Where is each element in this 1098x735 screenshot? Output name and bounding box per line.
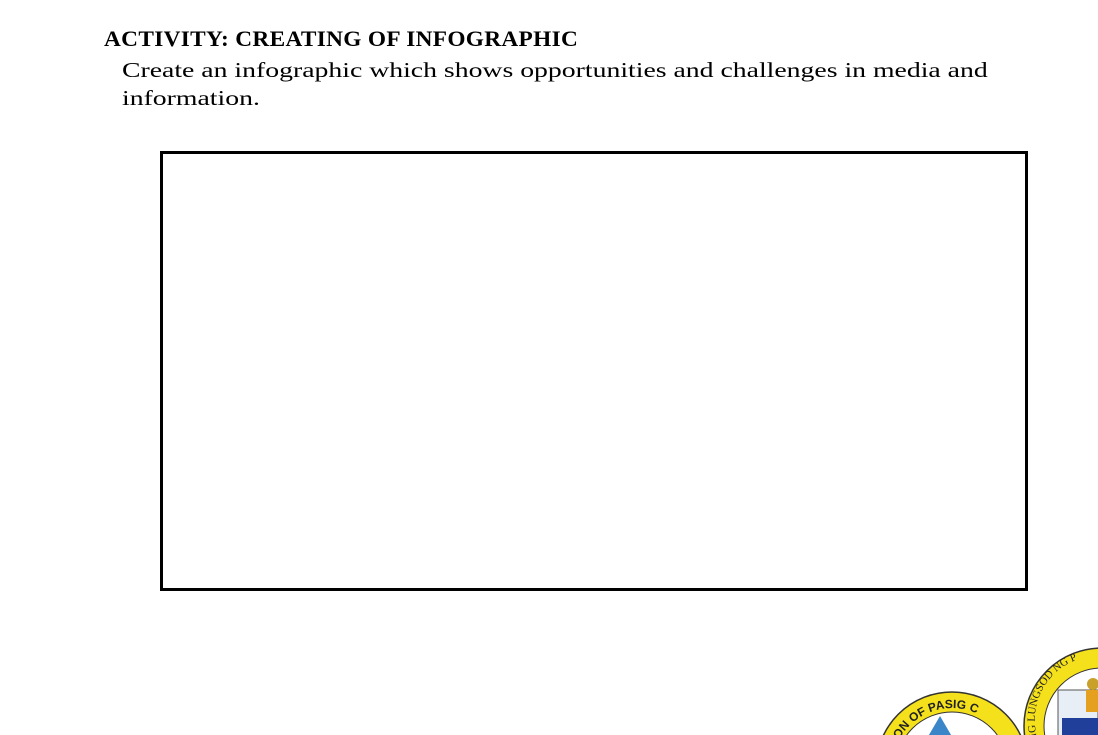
title: ACTIVITY: CREATING OF INFOGRAPHIC (104, 26, 578, 51)
instructions text (122, 58, 988, 110)
logo: division of pasig seal (882, 691, 1022, 735)
instructions text: information. (122, 86, 260, 110)
empty infographic box (160, 151, 1028, 591)
logo: lungsod ng pasig seal (1023, 647, 1098, 735)
instructions text: Create an infographic which shows opportunities and challenges in media and (122, 58, 988, 82)
